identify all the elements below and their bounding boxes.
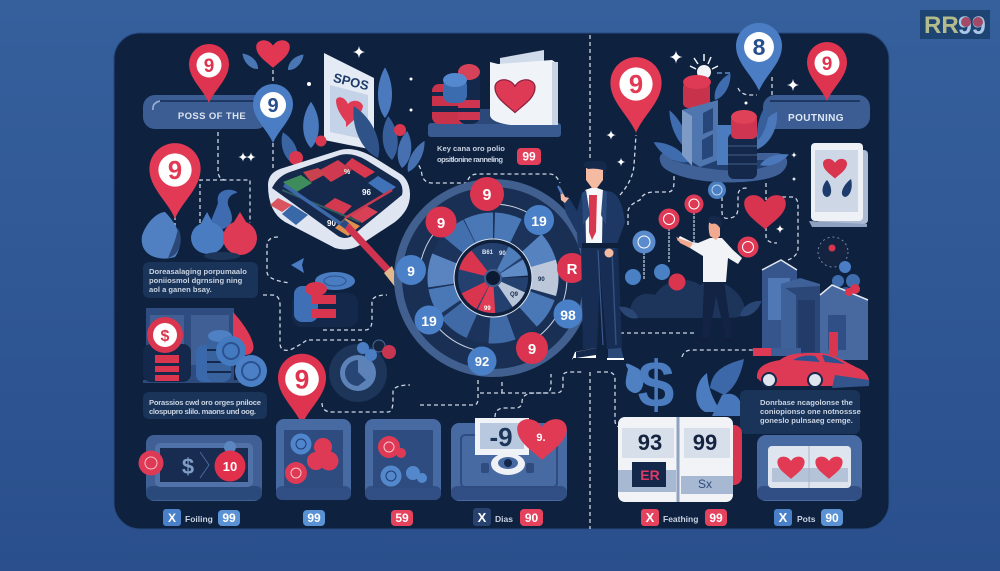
roulette wheel: 90 — [538, 277, 545, 283]
chips and card top centre — [428, 50, 561, 137]
legend: foiling: X — [168, 511, 176, 525]
text box lower left — [143, 392, 267, 419]
legend: feathing: 99 — [709, 511, 723, 525]
logo: RR — [924, 12, 959, 39]
logo — [920, 10, 990, 40]
dollar sign and leaves: $ — [638, 347, 674, 421]
businessman — [558, 161, 625, 360]
legend: pots — [774, 509, 843, 526]
legend: 99 — [303, 510, 325, 526]
wheel number balls: 9 — [528, 341, 536, 358]
card: hearts — [757, 435, 862, 501]
pin: red top left: 9 — [204, 56, 214, 77]
legend: 99: 99 — [307, 511, 321, 525]
legend: feathing: X — [646, 510, 655, 525]
card: screen with heart — [451, 418, 567, 501]
card: screen with heart: -9 — [489, 422, 513, 452]
text box upper left — [143, 262, 258, 298]
lollipop icons — [625, 181, 758, 290]
roulette wheel: B61 — [482, 250, 494, 256]
pin: blue 8: 8 — [753, 34, 766, 60]
leaves near heart — [240, 51, 306, 73]
pin: blue: 9 — [267, 95, 279, 117]
red dots — [289, 124, 406, 165]
text box upper left: Doreasalaging porpumaalo — [149, 267, 247, 276]
legend: 59: 59 — [395, 511, 409, 525]
chips panel left: $ — [161, 328, 170, 345]
wheel number balls: 9 — [483, 187, 492, 204]
slot machine — [618, 417, 742, 502]
text box lower left: clospupro slilo. maons und oog. — [149, 407, 256, 416]
buildings — [753, 260, 868, 360]
logo: 99 — [958, 12, 986, 40]
pin: red right: 9 — [629, 71, 643, 99]
roulette wheel — [394, 179, 592, 377]
pin: red right — [610, 57, 662, 133]
legend row — [163, 508, 843, 526]
card: chips 1 — [276, 419, 351, 500]
coin ring icon — [329, 340, 396, 402]
wheel number balls: 9 — [437, 215, 445, 232]
wheel number balls: R — [567, 261, 578, 278]
text box lower right: coniopionso one notnossse — [760, 407, 861, 416]
wheel number balls: 92 — [475, 354, 489, 369]
legend: foiling: 99 — [222, 511, 236, 525]
pin: blue — [253, 84, 293, 143]
card: cash: 10 — [223, 459, 237, 474]
red car — [757, 353, 869, 388]
text box upper left: aol a ganen bsay. — [149, 285, 212, 294]
pencil — [284, 185, 407, 302]
slot machine: 93 — [638, 430, 662, 455]
pin: red top right: 9 — [822, 54, 832, 75]
card: screen with heart: 9. — [536, 432, 546, 444]
legend: dias: X — [478, 510, 487, 525]
text box upper left: poniiosmol dgrnsing ning — [149, 276, 243, 285]
connector lines — [175, 35, 798, 529]
text box lower right: goneslo pulnsaeg cemge. — [760, 416, 853, 425]
text box lower left: Porassios cwd oro orges pniloce — [149, 398, 261, 407]
leaf left — [142, 212, 181, 259]
arrow left — [291, 258, 308, 273]
wheel number balls: 19 — [531, 213, 547, 229]
main panel — [114, 33, 889, 529]
card: cash — [138, 435, 262, 501]
badge 99 top: 99 — [522, 150, 536, 164]
pin: big red left: 9 — [168, 157, 182, 185]
wheel number balls: 98 — [560, 307, 576, 323]
text box lower right — [740, 390, 861, 434]
pin: red bottom centre-left — [278, 354, 326, 425]
heart centre right — [744, 195, 786, 229]
banner: poss of the — [143, 95, 268, 129]
wheel number balls: 9 — [407, 263, 415, 279]
card: spos — [324, 53, 374, 150]
second man and bush — [617, 216, 764, 342]
pin: big red left — [149, 143, 201, 219]
wheel number balls — [396, 177, 587, 376]
text: key cana — [437, 144, 505, 164]
pin: red bottom centre-left: 9 — [295, 365, 309, 395]
legend: dias — [473, 508, 543, 526]
pin: red top left — [189, 44, 229, 103]
banner: poss of the: POSS OF THE — [178, 111, 246, 122]
legend: dias: 90 — [525, 511, 538, 525]
badge 99 top — [517, 148, 541, 165]
drops icon — [191, 190, 257, 260]
legend: 59 — [391, 510, 413, 526]
pin: red top right — [807, 42, 847, 101]
platform with book and chips — [651, 54, 790, 182]
chips panel left — [143, 308, 267, 387]
legend: feathing: Feathing — [663, 514, 698, 524]
sparkles right — [606, 50, 799, 233]
roulette wheel: Q9 — [510, 292, 519, 298]
legend: foiling — [163, 509, 240, 526]
text: key cana: opsitlonine ranneling — [437, 155, 503, 164]
roulette wheel: 99 — [484, 306, 491, 312]
pin: blue 8 — [736, 23, 782, 91]
wheel number balls: 19 — [421, 313, 437, 329]
roulette board — [268, 149, 410, 249]
roulette board: 90 — [327, 219, 336, 228]
banner: pouting — [763, 95, 870, 129]
slot machine: ER — [640, 467, 660, 483]
leaves behind board — [277, 102, 319, 167]
legend: pots: X — [779, 510, 788, 525]
card: spos: SPOS — [332, 70, 371, 93]
heart top — [256, 40, 290, 68]
roulette wheel: 90 — [499, 251, 506, 257]
legend: pots: Pots — [797, 514, 816, 524]
slot machine: Sx — [698, 477, 712, 491]
leaves right of card — [346, 67, 429, 174]
banner: pouting: POUTNING — [788, 113, 844, 124]
roulette board: % — [344, 169, 351, 176]
text box lower right: Donrbase ncagolonse the — [760, 398, 853, 407]
card: chips 2 — [365, 419, 441, 500]
dollar sign and leaves — [626, 347, 744, 421]
dot cluster — [818, 237, 860, 301]
legend: pots: 90 — [825, 511, 839, 525]
legend: feathing — [641, 509, 727, 526]
card right with heart — [809, 143, 868, 227]
slot machine: 99 — [693, 430, 717, 455]
roulette board: 96 — [362, 188, 371, 197]
card: cash: $ — [182, 454, 194, 479]
text: key cana: Key cana oro polio — [437, 144, 505, 153]
chip stack centre — [292, 272, 358, 327]
sparkles left — [238, 46, 412, 162]
legend: dias: Dias — [495, 514, 513, 524]
legend: foiling: Foiling — [185, 514, 213, 524]
